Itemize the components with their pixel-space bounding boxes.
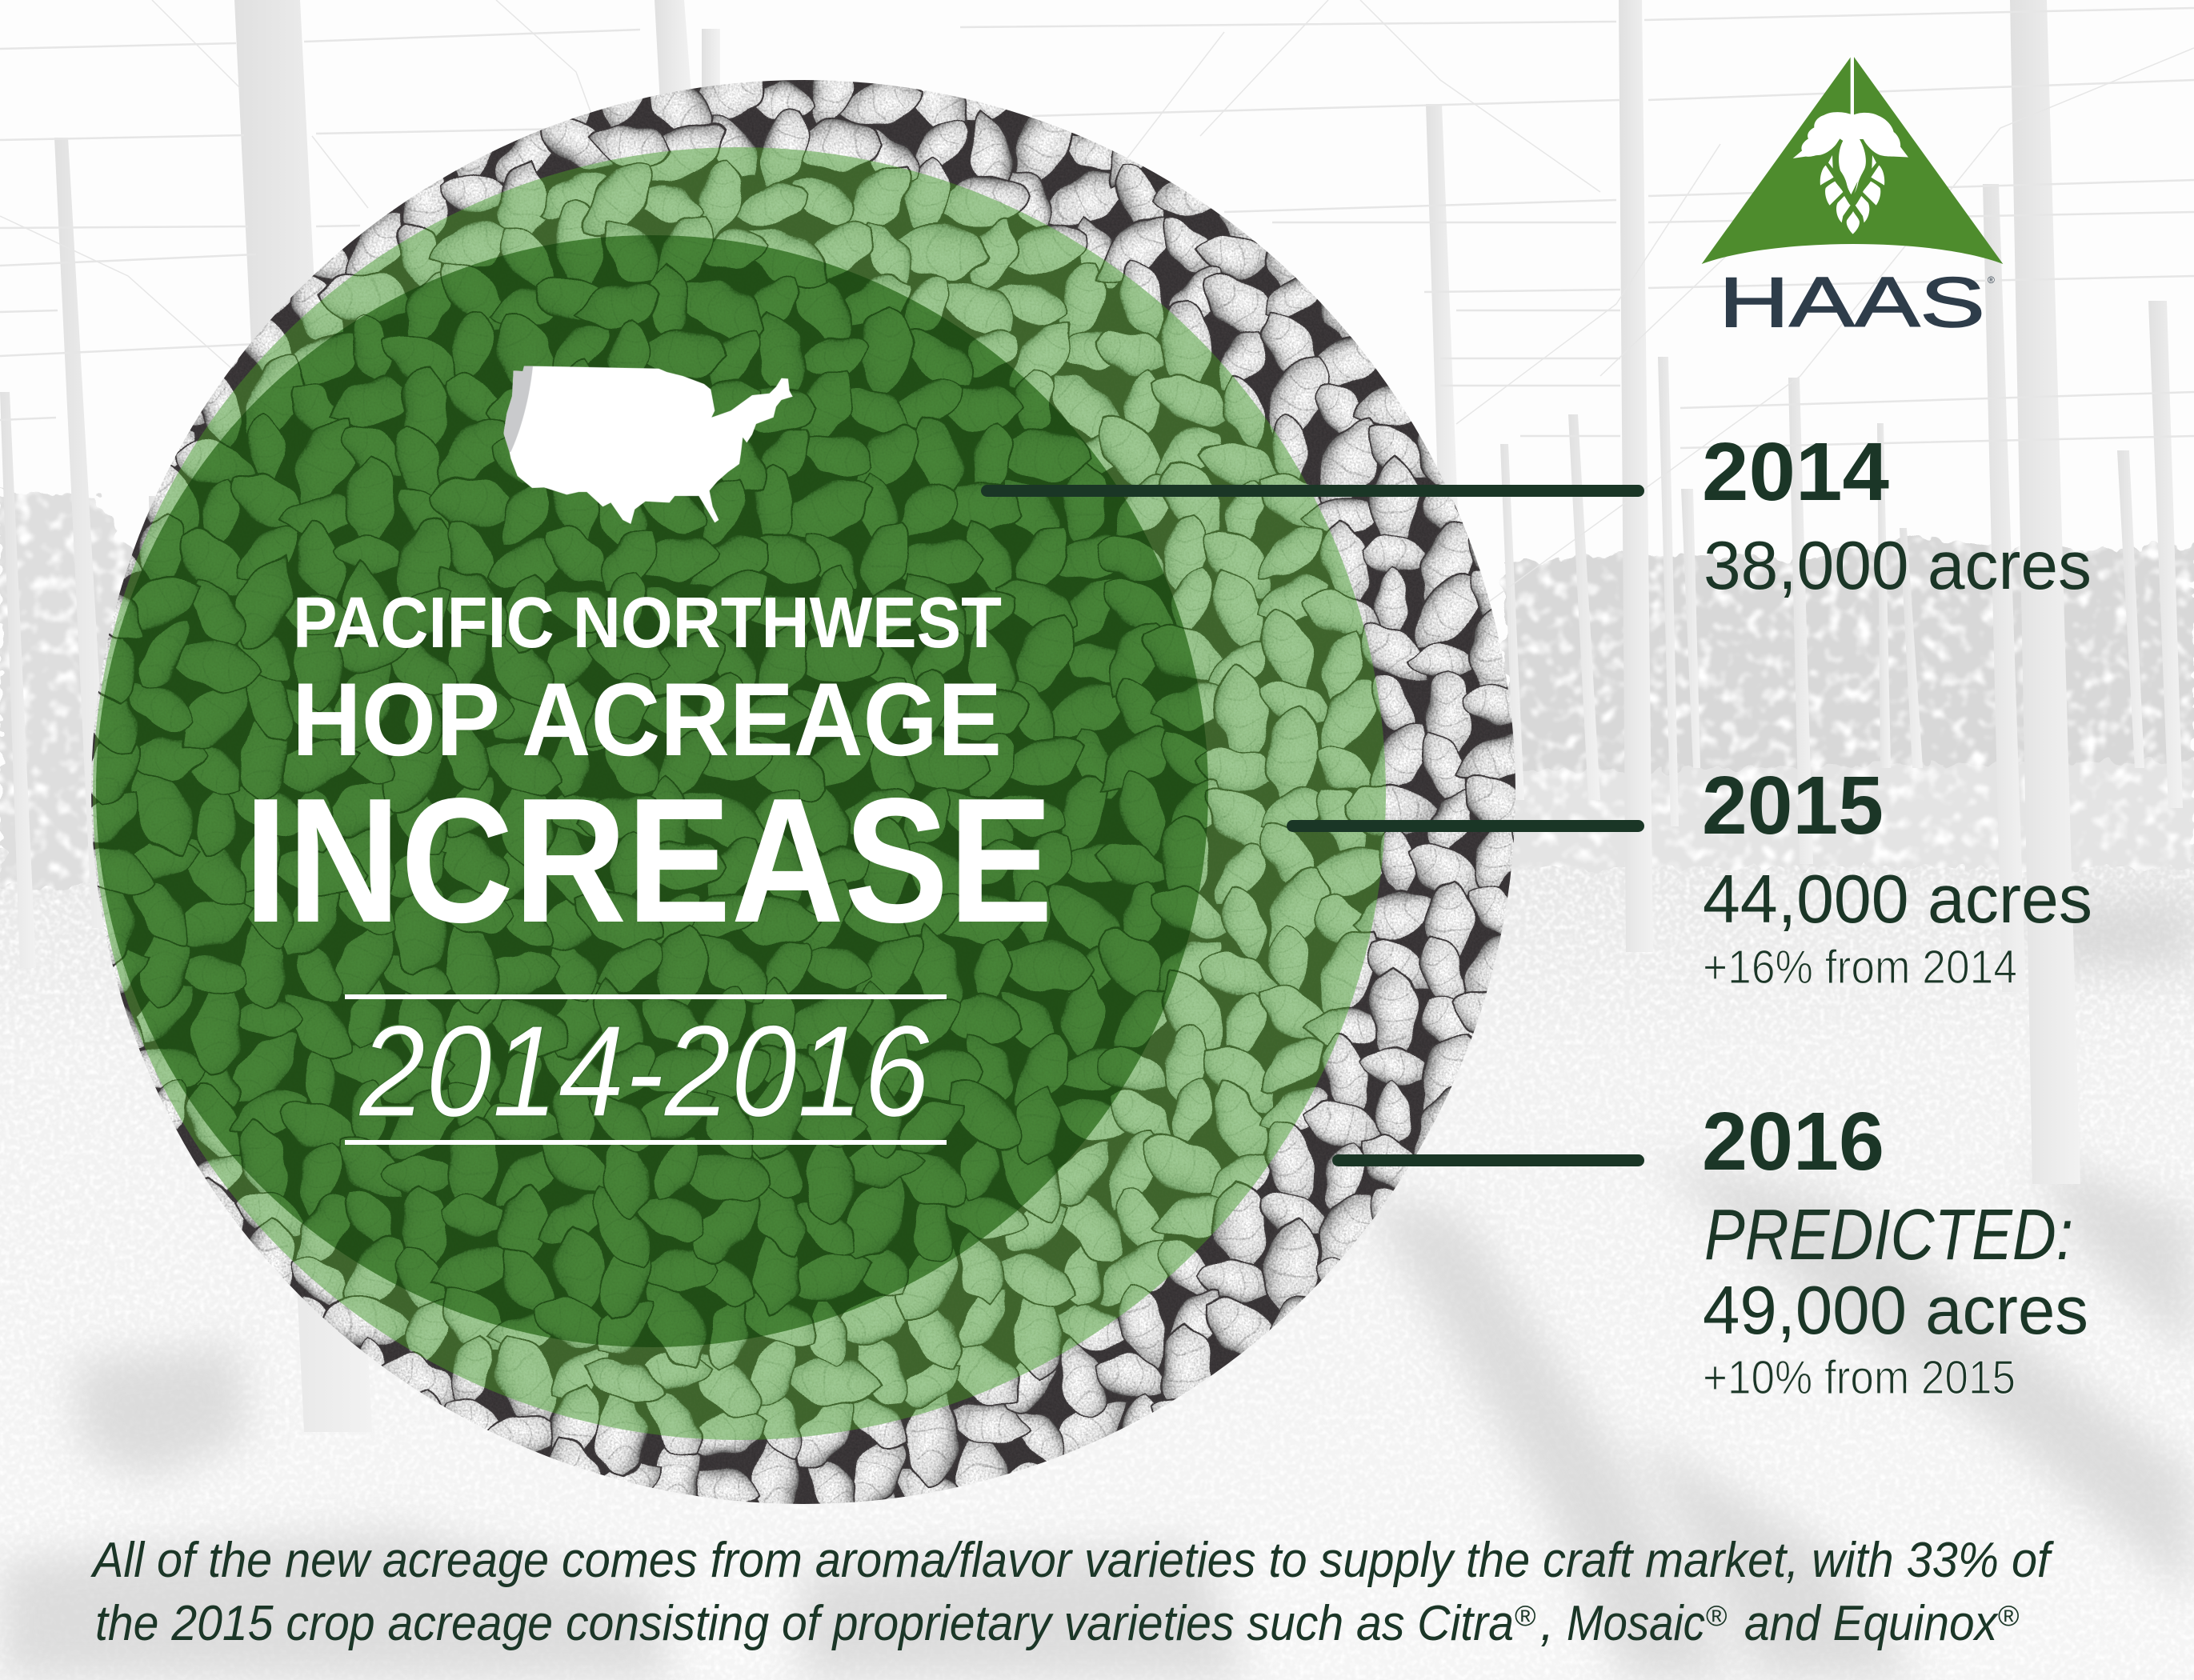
stat: 2015 — [1702, 759, 2092, 994]
footnote text: ® — [1706, 1599, 1728, 1632]
stat: 2014 — [1702, 426, 2092, 604]
connector: 2014 — [981, 485, 1644, 497]
connector: 2015 — [1287, 820, 1644, 832]
ground — [0, 848, 2194, 1680]
field shadows — [0, 896, 2194, 1680]
logo: Haas — [1702, 54, 2003, 342]
stat: 2016 predicted: 49,000 acres — [1703, 1273, 2088, 1349]
trellis wires — [0, 0, 2194, 608]
logo: Haas: ® — [1988, 274, 1995, 286]
stat: 2016 predicted: 2016 — [1702, 1095, 1884, 1187]
title — [244, 583, 1053, 960]
title: INCREASE — [244, 762, 1053, 960]
stat: 2016 predicted — [1702, 1095, 2088, 1404]
date range with rules: 2014-2016 — [358, 998, 930, 1144]
stat: 2014: 38,000 acres — [1704, 528, 2092, 604]
footnote text: All of the new acreage comes from aroma/flavor varieties to supply the craft market, with 33% of — [90, 1533, 2054, 1588]
hop circle: light green middle layer — [93, 147, 1386, 1440]
footnote text: Mosaic — [1567, 1596, 1705, 1651]
stat: 2015: +16% from 2014 — [1703, 941, 2017, 994]
footnote text: ® — [1998, 1599, 2020, 1632]
hop circle: grey outer layer — [91, 80, 1515, 1504]
connector: 2016 — [1332, 1154, 1644, 1166]
footnote text: and Equinox — [1744, 1596, 1999, 1651]
title: PACIFIC NORTHWEST — [293, 583, 1002, 663]
footnote text: the 2015 crop acreage consisting of proprietary varieties such as Citra — [95, 1596, 1514, 1651]
stat: 2016 predicted: PREDICTED: — [1704, 1195, 2073, 1275]
stat: 2016 predicted: +10% from 2015 — [1703, 1351, 2016, 1404]
footnote text: ® — [1515, 1599, 1536, 1632]
title: HOP ACREAGE — [292, 661, 1002, 778]
stat: 2014: 2014 — [1702, 426, 1889, 518]
stat: 2015: 44,000 acres — [1703, 862, 2092, 938]
icon: United States map with Pacific Northwest highlighted — [503, 366, 793, 524]
footnote text — [90, 1533, 2054, 1651]
hop circle: dark green inner layer — [96, 235, 1208, 1347]
icon: green triangle with hop — [1702, 54, 2003, 264]
logo: Haas: HAAS — [1719, 262, 1985, 342]
stat: 2015: 2015 — [1702, 759, 1884, 851]
footnote text: , — [1540, 1596, 1554, 1651]
trees and grass — [0, 490, 2194, 888]
